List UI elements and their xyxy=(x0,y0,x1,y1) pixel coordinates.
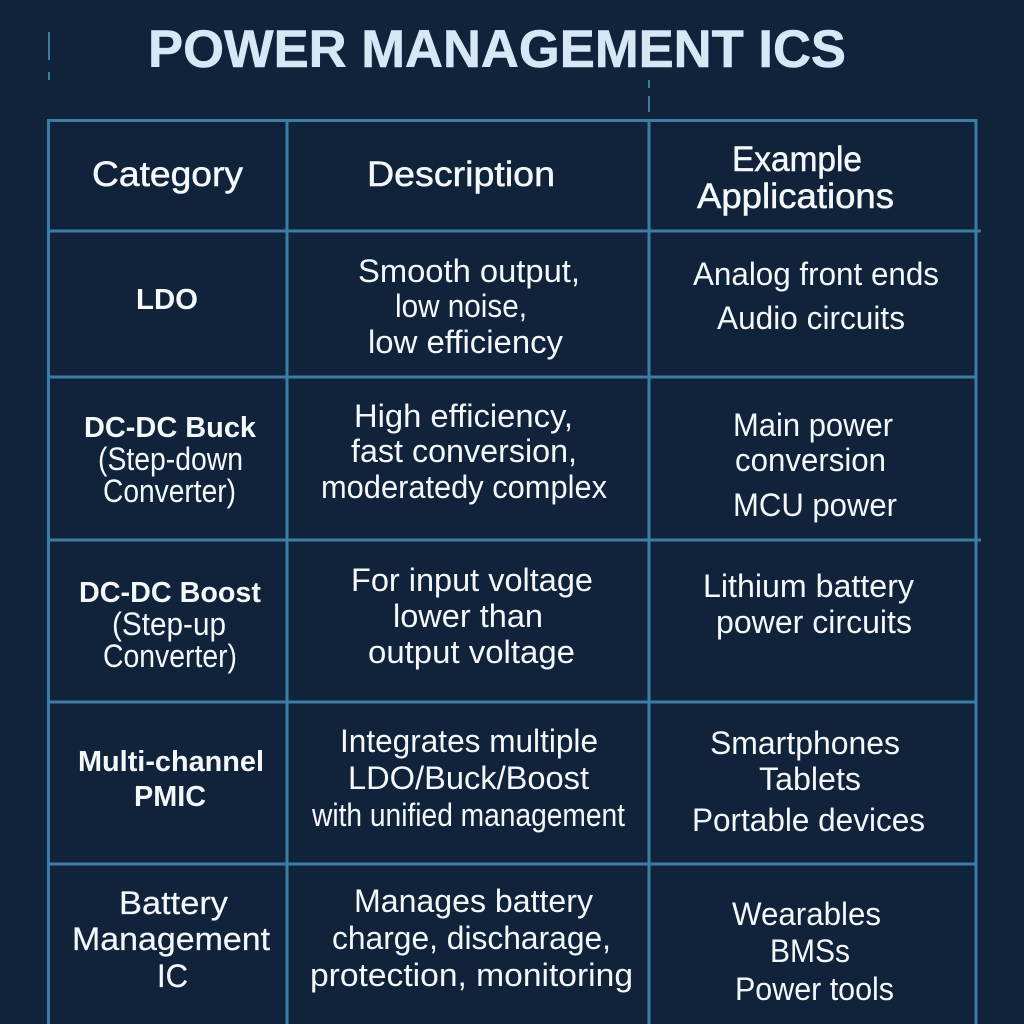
row: DC-DC Buck xyxy=(84,398,897,523)
description: DC-DC Boost: output voltage xyxy=(368,634,575,670)
applications: Battery Management IC: Power tools xyxy=(735,971,894,1007)
applications: DC-DC Boost xyxy=(703,568,914,640)
category: Battery Management IC: Management xyxy=(72,921,270,957)
description: LDO: low efficiency xyxy=(368,324,563,360)
category: LDO: LDO xyxy=(136,284,198,316)
row: DC-DC Boost xyxy=(79,562,914,674)
applications: Multi-channel PMIC: Smartphones xyxy=(710,725,900,761)
header: category: Category xyxy=(92,155,244,194)
row: LDO xyxy=(136,253,939,360)
description: LDO xyxy=(358,253,580,360)
category: DC-DC Boost: DC-DC Boost xyxy=(79,577,261,609)
applications: DC-DC Buck xyxy=(733,407,897,523)
description: Battery Management IC: charge, discharage, xyxy=(332,920,611,956)
description: Battery Management IC: protection, monitoring xyxy=(310,957,633,993)
category: DC-DC Boost xyxy=(79,577,261,674)
category: Battery Management IC: Battery xyxy=(119,885,228,921)
applications: LDO: Analog front ends xyxy=(693,256,939,292)
applications: Multi-channel PMIC: Portable devices xyxy=(692,802,925,838)
row: Multi-channel PMIC xyxy=(78,723,925,838)
category: Multi-channel PMIC: Multi-channel xyxy=(78,746,264,778)
description: DC-DC Buck: fast conversion, xyxy=(351,433,577,469)
applications: DC-DC Boost: Lithium battery xyxy=(703,568,914,604)
description: DC-DC Boost: For input voltage xyxy=(351,562,593,598)
category: Multi-channel PMIC: PMIC xyxy=(134,781,206,813)
description: LDO: low noise, xyxy=(395,288,527,324)
description: DC-DC Buck xyxy=(321,398,607,505)
applications: DC-DC Buck: conversion xyxy=(735,442,886,478)
category: DC-DC Buck: Converter) xyxy=(103,473,236,509)
description: Battery Management IC xyxy=(310,883,633,993)
applications: DC-DC Buck: Main power xyxy=(733,407,893,443)
description: LDO: Smooth output, xyxy=(358,253,580,289)
description: DC-DC Buck: moderatedy complex xyxy=(321,469,607,505)
description: Multi-channel PMIC xyxy=(311,723,625,833)
description: Battery Management IC: Manages battery xyxy=(354,883,593,919)
applications: Battery Management IC xyxy=(732,896,894,1007)
applications: Multi-channel PMIC: Tablets xyxy=(759,761,861,797)
applications: Multi-channel PMIC xyxy=(692,725,925,838)
applications: LDO: Audio circuits xyxy=(717,300,905,336)
category: DC-DC Buck: DC-DC Buck xyxy=(84,412,257,444)
header: example applications: Example xyxy=(732,140,862,179)
description: DC-DC Boost: lower than xyxy=(393,598,543,634)
category: DC-DC Boost: (Step-up xyxy=(112,606,226,642)
header: description: Description xyxy=(367,155,555,194)
applications: Battery Management IC: BMSs xyxy=(770,933,850,969)
description: Multi-channel PMIC: Integrates multiple xyxy=(340,723,598,759)
description: DC-DC Boost xyxy=(351,562,593,670)
applications: LDO xyxy=(693,256,939,336)
category: DC-DC Buck xyxy=(84,412,257,509)
table header row xyxy=(92,140,894,216)
description: DC-DC Buck: High efficiency, xyxy=(354,398,573,434)
applications: DC-DC Buck: MCU power xyxy=(733,487,897,523)
row: Battery Management IC xyxy=(72,883,894,1007)
header: example applications: Applications xyxy=(697,177,894,216)
description: Multi-channel PMIC: LDO/Buck/Boost xyxy=(348,760,589,796)
title: POWER MANAGEMENT ICS xyxy=(148,20,846,79)
applications: Battery Management IC: Wearables xyxy=(732,896,881,932)
description: Multi-channel PMIC: with unified management xyxy=(311,797,625,833)
category: Battery Management IC xyxy=(72,885,270,994)
category: Multi-channel PMIC xyxy=(78,746,264,813)
category: Battery Management IC: IC xyxy=(157,958,188,994)
header: example applications xyxy=(697,140,894,216)
applications: DC-DC Boost: power circuits xyxy=(716,604,912,640)
category: DC-DC Buck: (Step-down xyxy=(98,441,243,477)
category: DC-DC Boost: Converter) xyxy=(103,638,237,674)
